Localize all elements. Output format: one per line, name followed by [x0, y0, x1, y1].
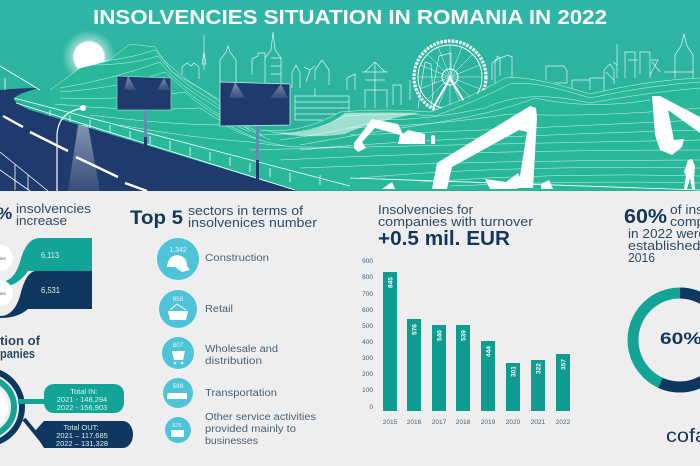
billboard 1 [117, 76, 171, 147]
callout: total in: 2022 - 156,903 [57, 403, 107, 412]
sector: wholesale [162, 337, 278, 369]
billboard 2 [220, 82, 290, 180]
heading: turnover: companies with turnover [378, 214, 534, 229]
sector: transportation [163, 378, 277, 408]
sector: construction: Construction [205, 253, 269, 264]
ribbon: 2022: 6,531 [41, 286, 61, 295]
y axis labels: 700 [362, 291, 373, 298]
sector: construction [157, 238, 269, 280]
heading: top 5: sectors in terms of [188, 203, 303, 218]
bar value labels: 539 [460, 330, 468, 341]
callout: total in: 2021 - 148,294 [57, 395, 107, 404]
bar chart [383, 272, 570, 411]
x axis labels: 2019 [481, 419, 496, 426]
y axis labels: 200 [362, 371, 373, 378]
heading: evolution [0, 333, 41, 361]
bar value labels: 357 [560, 359, 568, 370]
banner illustration [0, 0, 700, 191]
y axis labels [362, 258, 373, 411]
panel: top 5 sectors [130, 203, 318, 447]
sector: retail: 858 [173, 296, 184, 303]
large excavator [432, 106, 537, 189]
callout: total out: Total OUT: [63, 423, 99, 432]
heading: 60 percent [624, 202, 700, 265]
panel: turnover chart [362, 202, 571, 426]
bar value labels: 322 [536, 363, 542, 374]
callout: total out: 2022 – 131,328 [56, 439, 108, 448]
road dashes [3, 116, 147, 191]
light ridge [262, 112, 420, 136]
callout: total in: Total IN: [70, 387, 98, 396]
sector: other services: businesses [205, 436, 258, 447]
sector: construction: 1,342 [169, 247, 187, 254]
small figures [382, 180, 553, 189]
y axis labels: 500 [362, 323, 373, 330]
ring chart [0, 370, 22, 444]
heading: evolution: tion of [0, 333, 41, 348]
ferris wheel [414, 41, 486, 113]
x axis labels: 2020 [506, 419, 521, 426]
right excavator [652, 96, 700, 155]
callout: total out [24, 419, 133, 448]
road [0, 88, 297, 191]
donut chart [633, 293, 700, 387]
sector: other services: 576 [172, 423, 182, 429]
sector: retail [159, 290, 233, 328]
y axis labels: 300 [362, 355, 373, 362]
x axis labels: 2015 [383, 419, 398, 426]
sector: other services: Other service activities [205, 412, 316, 423]
panel: insolvencies increase [0, 202, 92, 318]
sector: other services [165, 412, 316, 447]
y axis labels: 600 [362, 307, 373, 314]
ribbon: 2021 [0, 238, 92, 288]
x axis labels [383, 419, 571, 426]
worker right [684, 159, 695, 189]
heading: turnover [378, 202, 534, 250]
sector: wholesale: distribution [205, 356, 262, 367]
worker [431, 135, 435, 144]
heading: top 5: Top 5 [130, 208, 183, 229]
y axis labels: 0 [369, 404, 373, 411]
x axis labels: 2017 [432, 419, 447, 426]
bar value labels: 845 [388, 277, 394, 288]
small excavator [354, 119, 425, 152]
sector: transportation: Transportation [205, 388, 277, 399]
heading: top 5 [130, 203, 318, 230]
callout: total out: 2021 – 117,685 [56, 431, 108, 440]
sun [62, 30, 116, 84]
x axis labels: 2022 [556, 419, 571, 426]
bar value labels: 576 [412, 324, 418, 335]
donut value: 60% [660, 329, 700, 348]
bar value labels: 301 [510, 366, 518, 377]
sector: wholesale: 807 [173, 342, 184, 349]
hills back [50, 44, 700, 190]
guard rail [0, 66, 700, 191]
sector: other services: provided mainly to [205, 424, 296, 435]
heading: evolution: panies [0, 346, 35, 361]
street lamp [57, 105, 100, 191]
ribbon: 2022: ies [0, 291, 7, 296]
hill contour lines [50, 44, 700, 186]
sector: retail: Retail [205, 304, 233, 315]
heading: turnover: +0.5 mil. EUR [378, 228, 511, 250]
panel: evolution of companies [0, 333, 133, 448]
ribbon: 2021: 6,113 [41, 251, 59, 260]
heading: 60 percent: 2016 [628, 250, 655, 265]
heading: top 5: insolvenices number [188, 215, 318, 230]
panel: 60 percent [624, 202, 700, 447]
callout: total in [18, 384, 124, 413]
title: INSOLVENCIES SITUATION IN ROMANIA IN 2022 [93, 6, 607, 29]
heading: turnover: Insolvencies for [378, 202, 474, 217]
bar value labels [388, 277, 568, 377]
x axis labels: 2016 [407, 419, 422, 426]
sector: transportation: 588 [173, 383, 184, 390]
y axis labels: 900 [362, 258, 373, 265]
x axis labels: 2021 [531, 419, 546, 426]
y axis labels: 100 [362, 387, 373, 394]
y axis labels: 800 [362, 274, 373, 281]
heading: increase: insolvencies [16, 202, 91, 216]
city skyline [182, 32, 694, 120]
sector: wholesale: Wholesale and [205, 344, 278, 355]
ribbon: 2022 [0, 271, 92, 318]
heading: 60 percent: 60% [624, 206, 667, 228]
heading: increase [0, 202, 91, 228]
x axis labels: 2018 [456, 419, 471, 426]
heading: increase: increase [16, 214, 67, 228]
y axis labels: 400 [362, 339, 373, 346]
bar value labels: 444 [486, 346, 492, 357]
bar value labels: 540 [436, 330, 444, 341]
ribbon: 2021: ies [0, 256, 7, 261]
